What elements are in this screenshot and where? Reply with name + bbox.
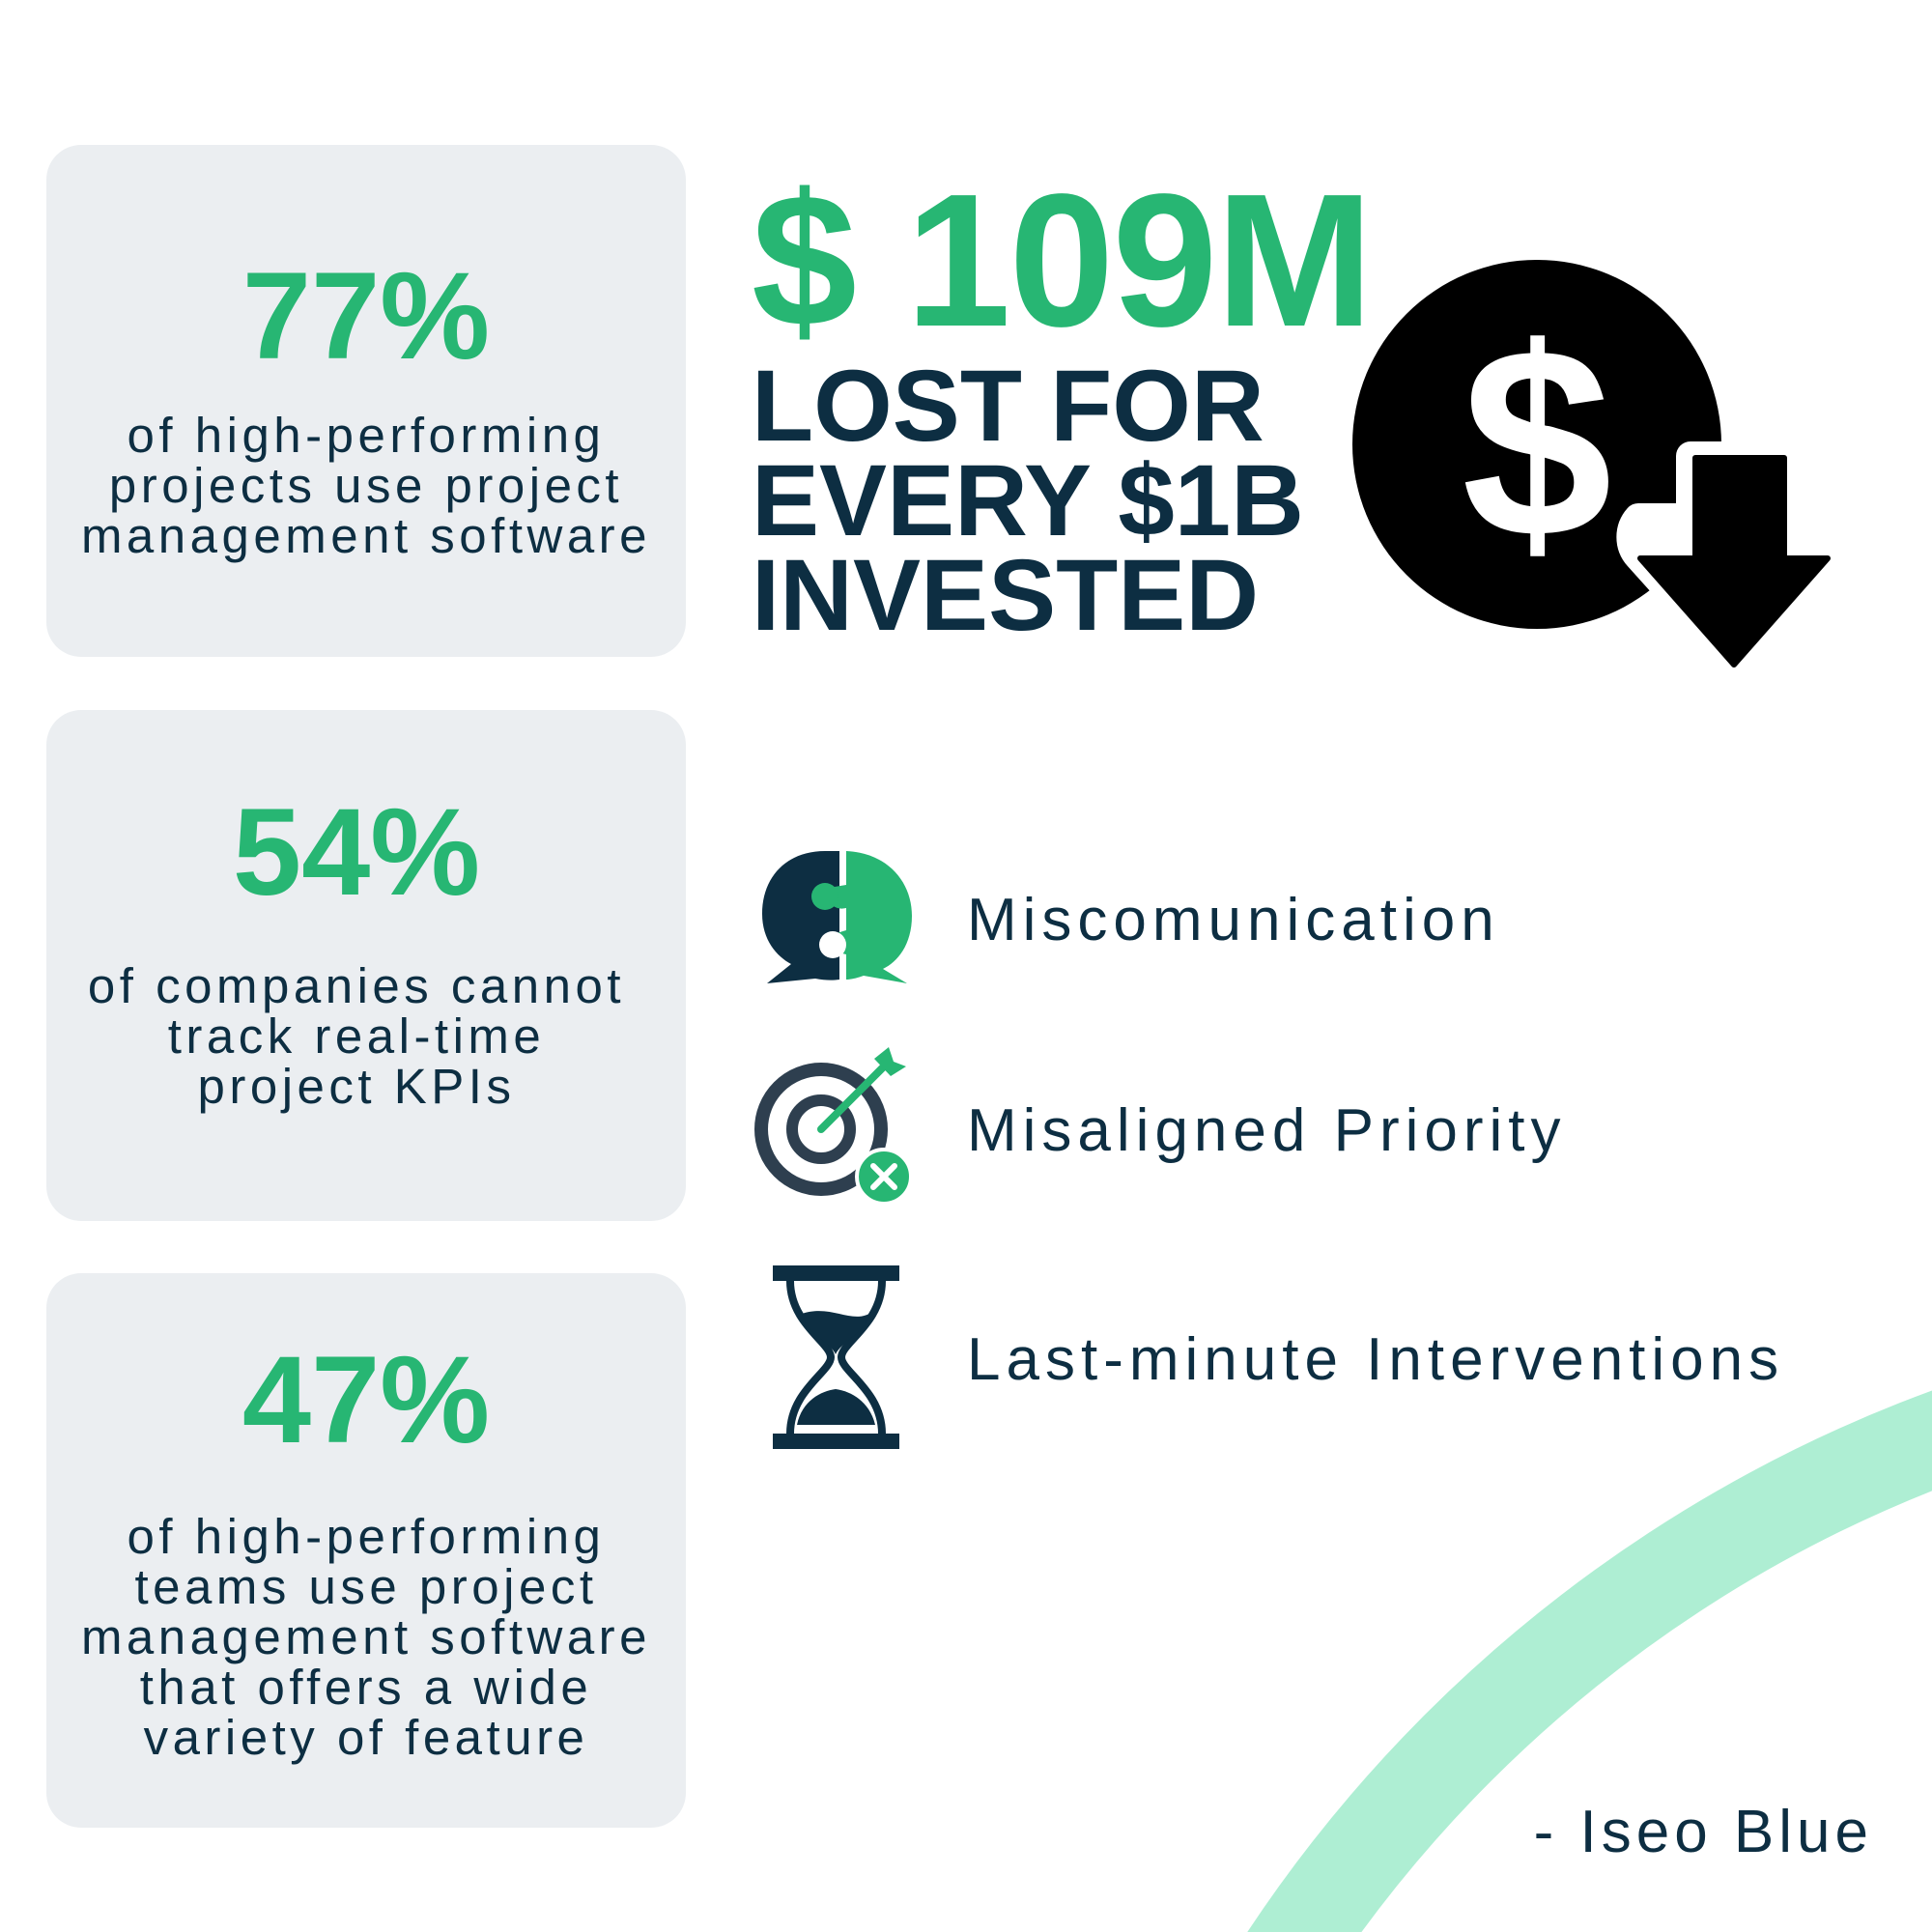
icon: miscommunication <box>762 851 912 983</box>
headline text <box>752 350 1304 652</box>
text 54%: track real-time <box>168 1009 545 1064</box>
icon: dollar down <box>1352 260 1831 668</box>
icon: target <box>754 1047 909 1202</box>
text 47%: that offers a wide <box>140 1660 592 1715</box>
label: last-minute interventions: Last-minute Interventions <box>967 1326 1784 1393</box>
icon: hourglass <box>773 1265 899 1449</box>
text 77%: of high-performing <box>128 408 605 463</box>
text 47%: of high-performing <box>128 1509 605 1564</box>
label: misaligned priority: Misaligned Priority <box>967 1097 1567 1164</box>
text 47%: management software <box>81 1609 651 1664</box>
headline amount: $ 109M <box>752 155 1372 366</box>
text 47%: teams use project <box>134 1559 598 1614</box>
panel: 47% <box>46 1273 686 1828</box>
text 77% <box>81 408 651 563</box>
text 77%: management software <box>81 508 651 563</box>
headline text: EVERY $1B <box>752 444 1304 557</box>
text 54% <box>88 958 625 1114</box>
attribution: - Iseo Blue <box>1534 1799 1873 1865</box>
text 47% <box>81 1509 651 1765</box>
stat 47%: 47% <box>242 1331 490 1469</box>
icon: dollar down: $ <box>1462 293 1612 594</box>
headline text: INVESTED <box>752 539 1259 652</box>
headline text: LOST FOR <box>752 350 1264 463</box>
stat 54%: 54% <box>233 783 480 922</box>
text 47%: variety of feature <box>144 1710 588 1765</box>
stat 77%: 77% <box>242 247 490 385</box>
label: miscommunication: Miscomunication <box>967 887 1500 953</box>
text 77%: projects use project <box>109 458 623 513</box>
text 54%: of companies cannot <box>88 958 625 1013</box>
text 54%: project KPIs <box>198 1059 515 1114</box>
panel: 54% <box>46 710 686 1221</box>
panel: 77% <box>46 145 686 657</box>
